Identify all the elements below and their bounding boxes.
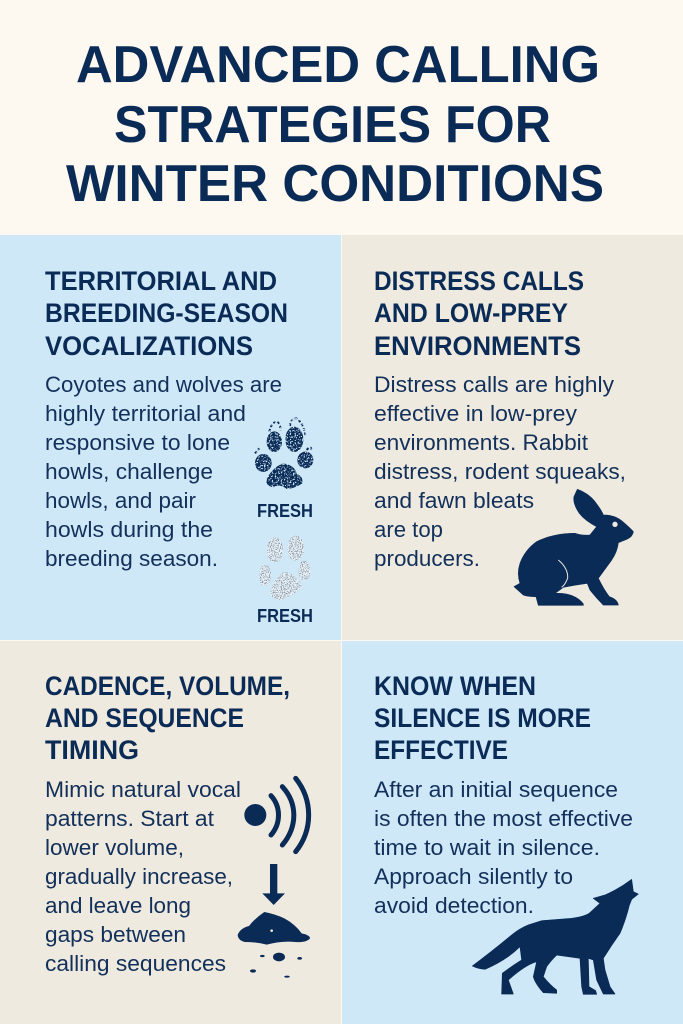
heading: distress: ENVIRONMENTS — [374, 331, 581, 361]
icon: rabbit — [514, 489, 633, 605]
heading: cadence: TIMING — [45, 735, 139, 765]
icon: snow mound — [238, 912, 310, 978]
title: WINTER CONDITIONS — [66, 155, 604, 213]
heading: territorial: TERRITORIAL AND — [45, 266, 277, 296]
heading: distress: AND LOW-PREY — [374, 298, 568, 328]
label: fresh: FRESH — [257, 606, 313, 626]
text: distress body — [374, 372, 626, 571]
title: ADVANCED CALLING — [76, 36, 600, 94]
text: silence body: time to wait in silence. — [374, 835, 600, 860]
heading: silence — [374, 671, 591, 765]
text: silence body: is often the most effective — [374, 806, 633, 831]
label: fresh: FRESH — [257, 501, 313, 521]
text: cadence body: gaps between — [45, 922, 186, 947]
text: cadence body: patterns. Start at — [45, 806, 215, 831]
text: cadence body: and leave long — [45, 893, 191, 918]
icon: down arrow — [262, 864, 285, 905]
heading: silence: KNOW WHEN — [374, 671, 536, 701]
text: cadence body: lower volume, — [45, 835, 184, 860]
text: cadence body: gradually increase, — [45, 864, 233, 889]
title — [66, 36, 604, 213]
text: distress body: Distress calls are highly — [374, 372, 615, 397]
icon: sound waves — [244, 778, 309, 852]
text: cadence body — [45, 777, 241, 976]
panel: distress calls — [342, 235, 683, 640]
text: silence body: avoid detection. — [374, 893, 534, 918]
panel: cadence and timing — [0, 641, 341, 1024]
text: territorial body: highly territorial and — [45, 401, 246, 426]
heading: distress: DISTRESS CALLS — [374, 266, 584, 296]
text: distress body: distress, rodent squeaks, — [374, 459, 626, 484]
text: territorial body: howls, challenge — [45, 459, 213, 484]
heading: territorial: BREEDING-SEASON — [45, 298, 288, 328]
text: distress body: are top — [374, 517, 443, 542]
text: silence body: Approach silently to — [374, 864, 573, 889]
panel: silence — [342, 641, 683, 1024]
text: territorial body: breeding season. — [45, 546, 218, 571]
heading: silence: SILENCE IS MORE — [374, 703, 591, 733]
heading: distress — [374, 266, 584, 361]
text: territorial body: responsive to lone — [45, 430, 230, 455]
icon: howling wolf — [472, 879, 638, 994]
heading: territorial: VOCALIZATIONS — [45, 331, 253, 361]
text: distress body: environments. Rabbit — [374, 430, 589, 455]
panel: territorial vocalizations — [0, 235, 341, 640]
text: cadence body: Mimic natural vocal — [45, 777, 241, 802]
text: territorial body — [45, 372, 282, 571]
header background — [0, 0, 683, 235]
text: territorial body: howls, and pair — [45, 488, 196, 513]
text: territorial body: Coyotes and wolves are — [45, 372, 282, 397]
icon: fresh dark paw print — [255, 418, 313, 489]
title: STRATEGIES FOR — [114, 96, 551, 154]
heading: cadence: CADENCE, VOLUME, — [45, 671, 290, 701]
text: distress body: and fawn bleats — [374, 488, 534, 513]
heading: silence: EFFECTIVE — [374, 735, 508, 765]
heading: cadence — [45, 671, 290, 765]
text: distress body: effective in low-prey — [374, 401, 578, 426]
icon: faded paw print — [259, 536, 310, 600]
text: silence body — [374, 777, 633, 918]
text: cadence body: calling sequences — [45, 951, 226, 976]
text: silence body: After an initial sequence — [374, 777, 618, 802]
heading: territorial — [45, 266, 288, 361]
text: territorial body: howls during the — [45, 517, 213, 542]
heading: cadence: AND SEQUENCE — [45, 703, 244, 733]
text: distress body: producers. — [374, 546, 480, 571]
